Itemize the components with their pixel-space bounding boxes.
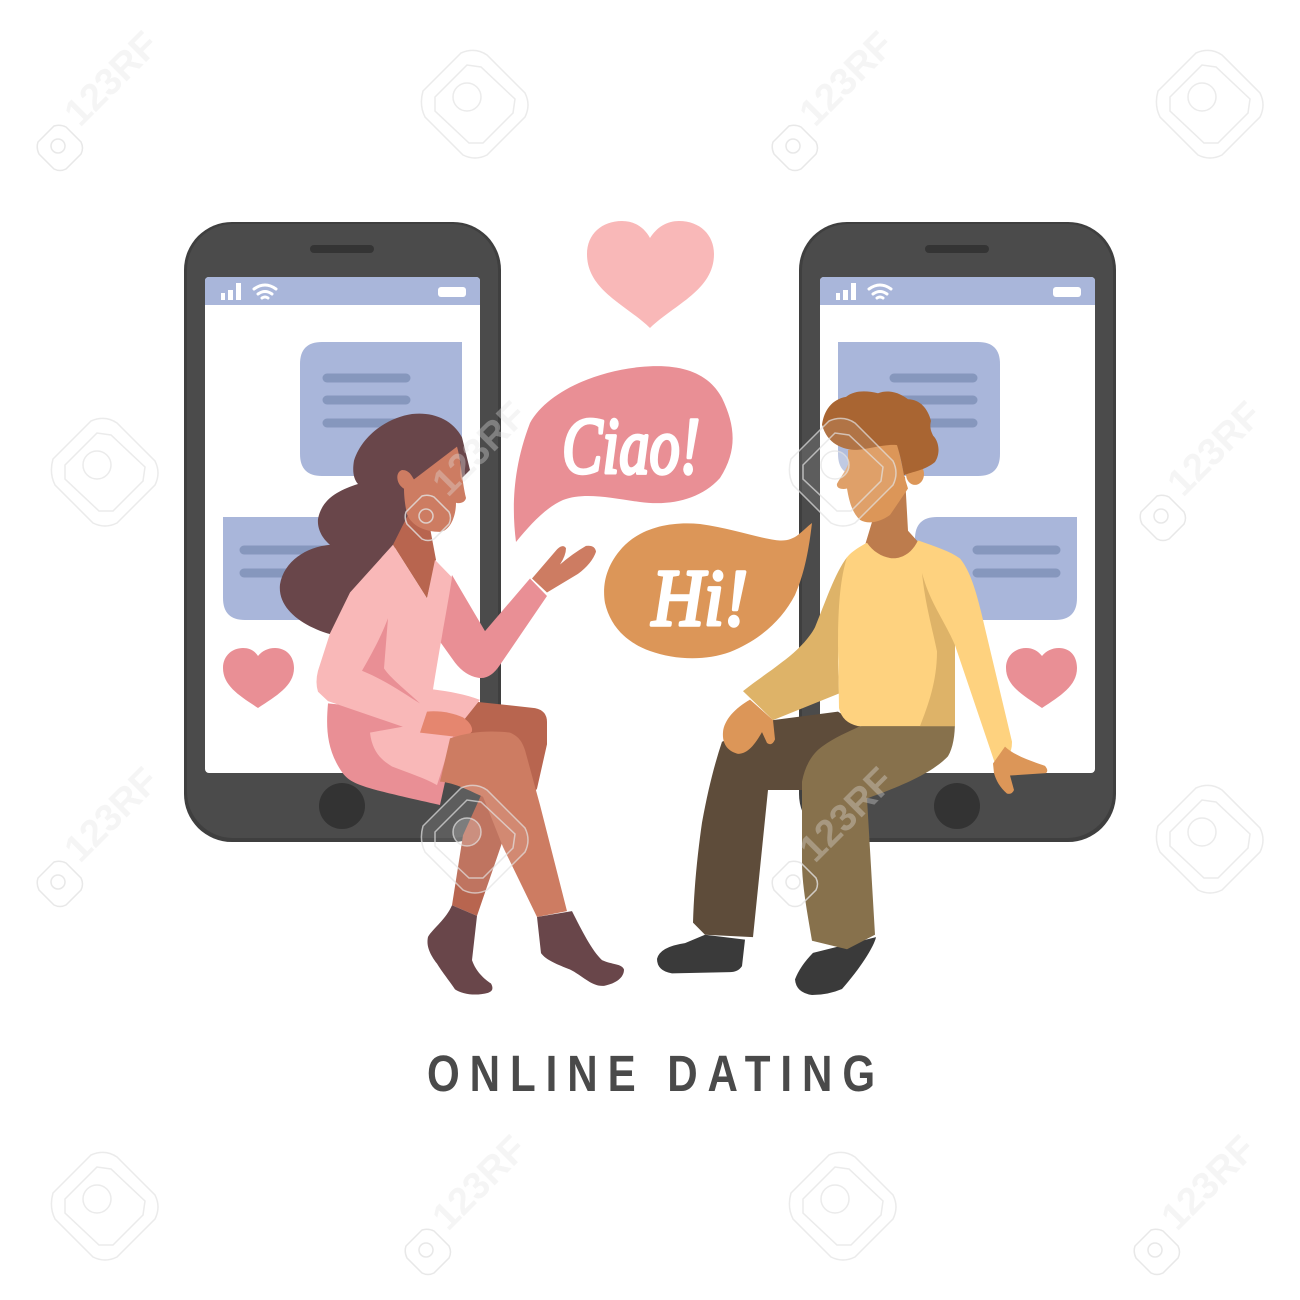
hand: on phone xyxy=(993,747,1047,794)
watermark overlay: 123RF xyxy=(425,394,535,504)
small heart xyxy=(223,648,294,708)
face xyxy=(397,447,466,532)
hair xyxy=(280,414,470,635)
right shoe xyxy=(795,937,876,995)
screen xyxy=(820,277,1095,773)
signal icon xyxy=(221,283,241,300)
man character xyxy=(657,391,1047,995)
watermark overlay: 123RF xyxy=(792,24,902,134)
signal icon xyxy=(836,283,856,300)
hand: on knee xyxy=(723,700,775,754)
trousers: far leg xyxy=(693,712,860,937)
speech bubble: Ciao xyxy=(514,366,733,542)
watermark overlay: 123RF xyxy=(1160,394,1270,504)
left sock xyxy=(427,905,492,995)
home button xyxy=(934,783,980,829)
lower chat bubble xyxy=(223,517,372,620)
face xyxy=(837,443,908,522)
right sock xyxy=(537,911,624,986)
wifi icon xyxy=(254,285,276,298)
trousers: near leg xyxy=(802,720,955,949)
hand: on lap xyxy=(420,711,472,737)
left phone xyxy=(184,222,501,842)
neck xyxy=(865,476,920,563)
right phone xyxy=(799,222,1116,842)
battery icon xyxy=(438,287,466,297)
shirt shade xyxy=(920,573,955,726)
torso and left sleeve xyxy=(316,545,480,733)
watermark overlay: 123RF xyxy=(57,24,167,134)
status bar xyxy=(820,277,1095,305)
left shoe xyxy=(657,935,745,973)
phone body xyxy=(799,222,1116,842)
front leg xyxy=(440,732,567,917)
greeting text: Hi! xyxy=(651,555,748,643)
greeting text: Ciao! xyxy=(562,403,700,491)
lower chat bubble xyxy=(915,517,1077,620)
speaker xyxy=(310,245,374,253)
screen xyxy=(205,277,480,773)
skirt xyxy=(327,703,465,805)
bubble shape xyxy=(514,366,733,542)
right arm xyxy=(440,575,547,678)
small heart xyxy=(1006,648,1077,708)
watermark overlay: 123RF xyxy=(425,1128,535,1238)
sleeve shade xyxy=(362,618,420,703)
battery icon xyxy=(1053,287,1081,297)
bubble shape xyxy=(604,523,812,658)
woman character xyxy=(280,414,624,995)
home button xyxy=(319,783,365,829)
skirt highlight xyxy=(370,715,467,785)
upper bubble lines xyxy=(894,378,973,423)
hair xyxy=(822,391,939,475)
lower bubble lines xyxy=(977,550,1056,573)
speaker xyxy=(925,245,989,253)
upper chat bubble xyxy=(838,342,1000,476)
title: ONLINE DATING xyxy=(427,1045,885,1102)
back leg xyxy=(450,701,547,916)
upper bubble lines xyxy=(327,378,406,423)
phone body xyxy=(184,222,501,842)
watermark overlay: 123RF xyxy=(1154,1128,1264,1238)
lower bubble lines xyxy=(244,550,330,573)
upper chat bubble xyxy=(300,342,462,476)
ear xyxy=(906,463,924,485)
sleeve: far arm xyxy=(743,557,847,720)
watermark overlay: 123RF xyxy=(57,760,167,870)
status bar xyxy=(205,277,480,305)
big heart xyxy=(587,221,714,328)
wifi icon xyxy=(869,285,891,298)
hand: raised xyxy=(532,546,596,593)
watermark overlay: 123RF xyxy=(792,760,902,870)
neck xyxy=(393,511,436,598)
shirt and near arm xyxy=(838,540,1012,763)
speech bubble: Hi xyxy=(604,523,812,658)
